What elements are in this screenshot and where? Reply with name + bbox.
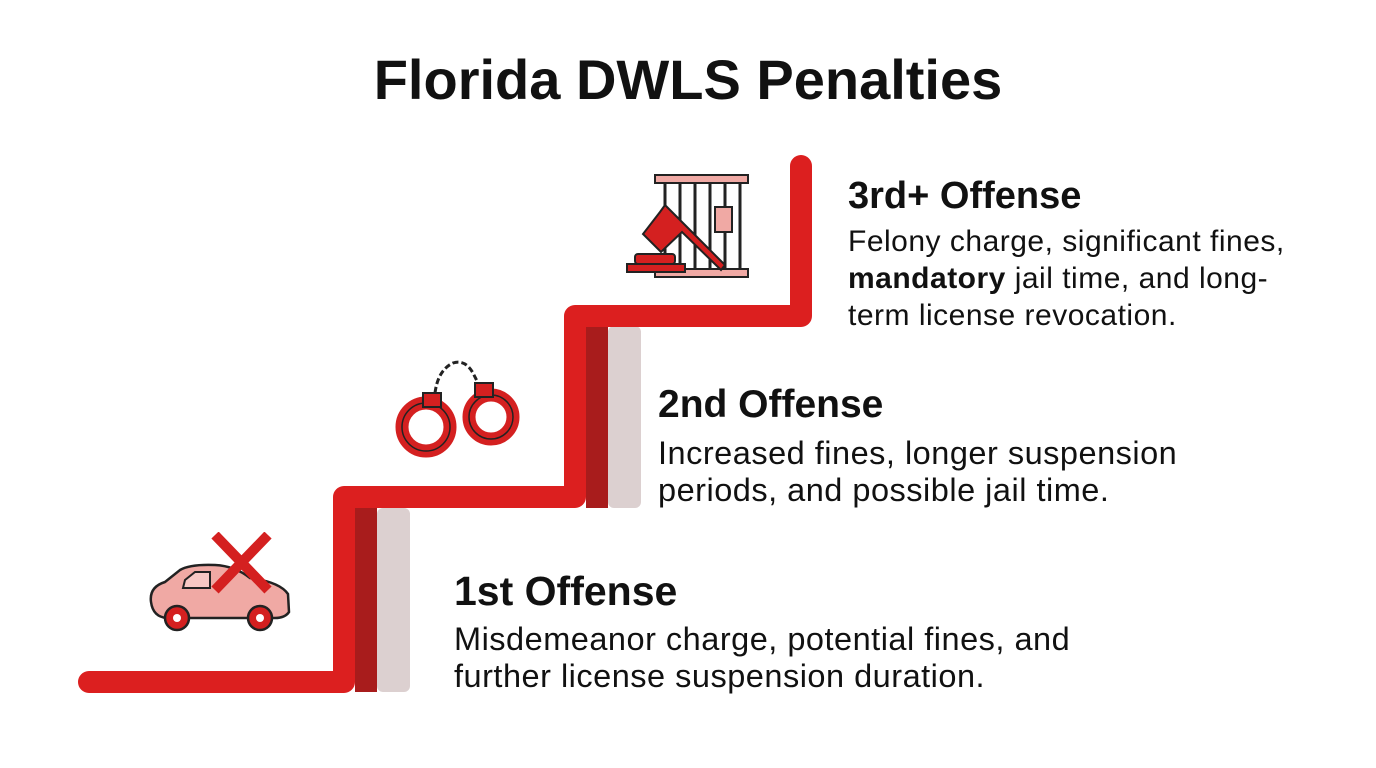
text: 2nd offense: 2nd Offense xyxy=(658,383,883,426)
text: 2nd offense: periods, and possible jail time. xyxy=(658,472,1109,508)
text: 3rd+ offense: Felony charge, significant fines, xyxy=(848,225,1285,258)
title: Florida DWLS Penalties xyxy=(374,48,1002,111)
icon: car with X xyxy=(150,532,290,632)
text: 1st offense xyxy=(454,568,1070,694)
text: 1st offense: 1st Offense xyxy=(454,568,677,614)
text: 2nd offense xyxy=(658,383,1177,508)
red staircase line xyxy=(89,166,801,682)
text: 3rd+ offense: 3rd+ Offense xyxy=(848,175,1081,217)
text: 3rd+ offense: term license revocation. xyxy=(848,299,1177,332)
shadow strips xyxy=(355,326,641,692)
text: 1st offense: Misdemeanor charge, potential fines, and xyxy=(454,621,1070,657)
icon: handcuffs xyxy=(396,360,520,458)
text: 2nd offense: Increased fines, longer suspension xyxy=(658,435,1177,471)
icon: gavel and jail xyxy=(626,174,749,278)
text: 3rd+ offense: mandatory jail time, and long- xyxy=(848,262,1268,295)
text: 3rd+ offense xyxy=(848,175,1285,332)
text: 1st offense: further license suspension duration. xyxy=(454,658,985,694)
